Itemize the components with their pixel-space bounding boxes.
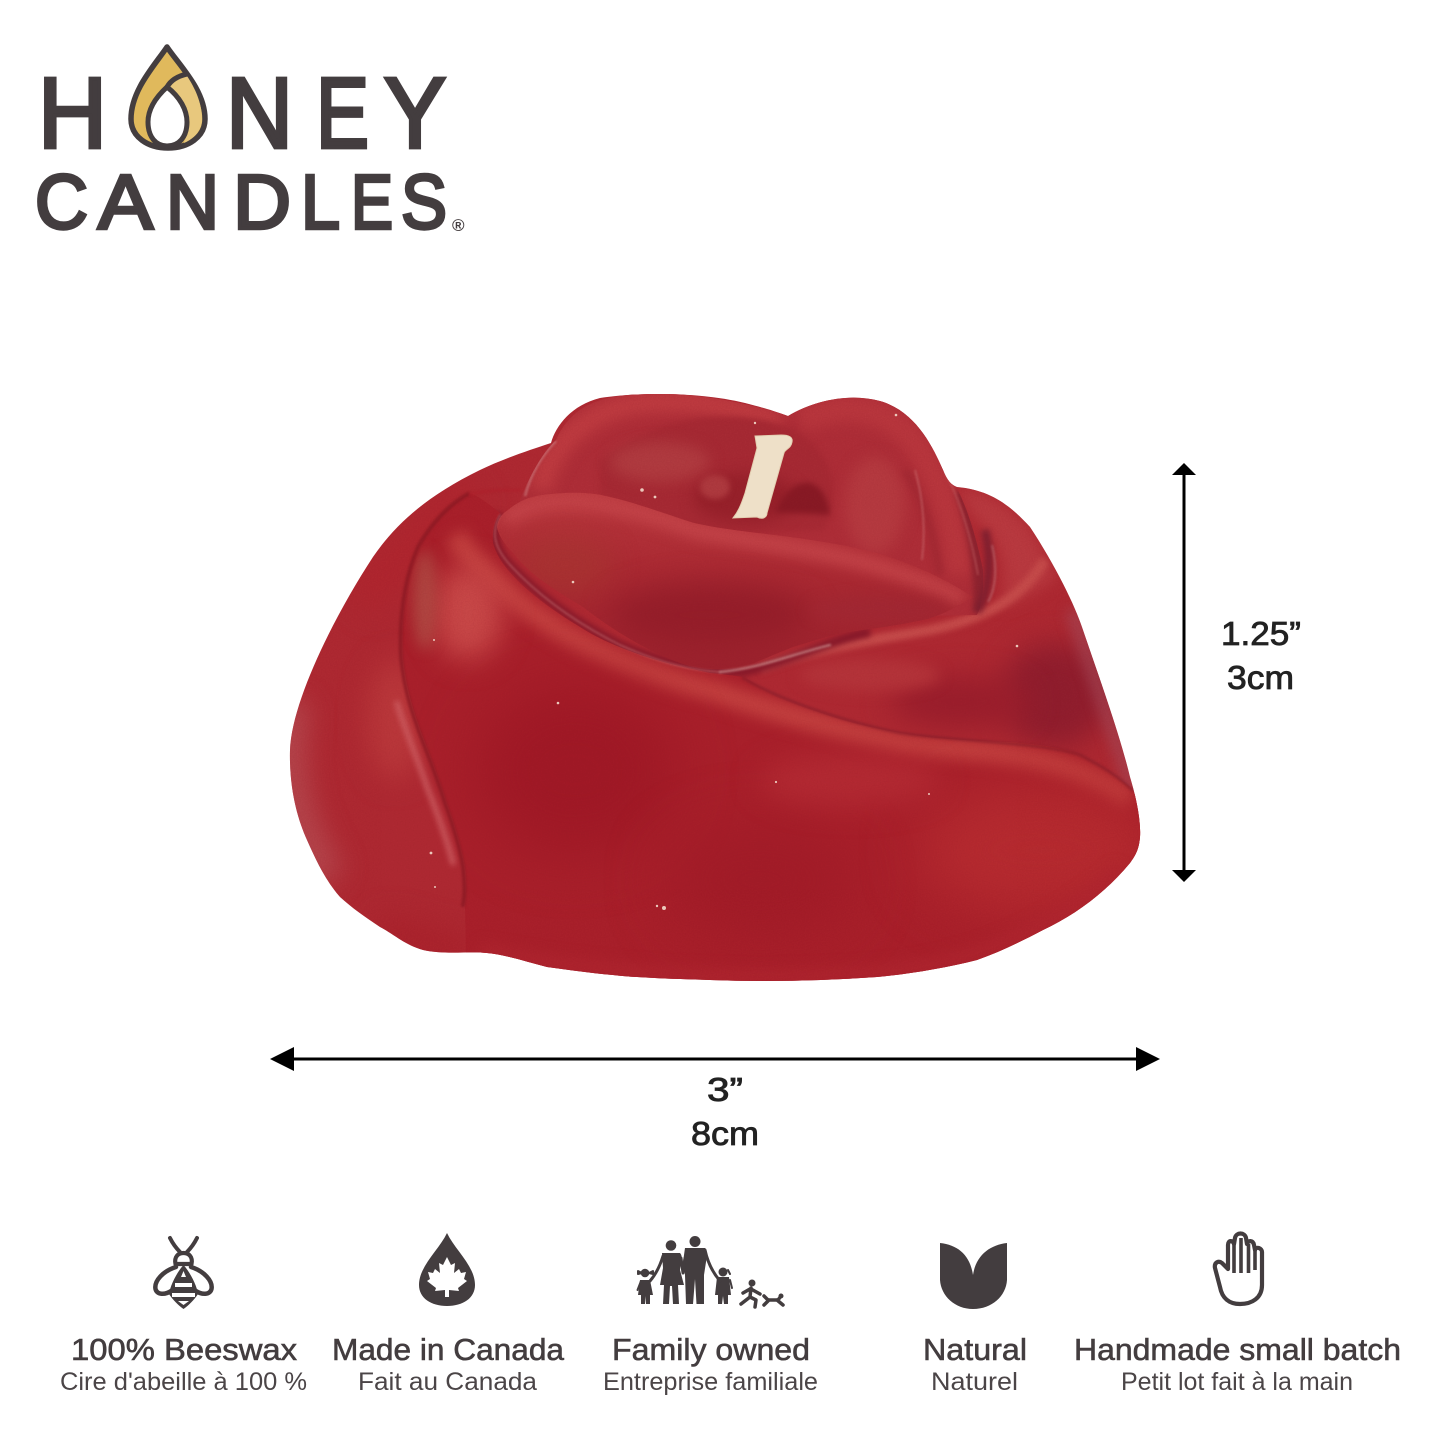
logo: Honey Candles <box>35 47 465 246</box>
outer petals base <box>280 385 1150 990</box>
icon: tulip leaf <box>940 1243 1007 1309</box>
width dimension arrow <box>270 1047 1160 1071</box>
logo wordmark: HONEY <box>38 58 446 170</box>
logo wordmark: HONEY: E <box>316 58 369 170</box>
heading: 100% Beeswax <box>71 1332 298 1367</box>
icon: open hand <box>1215 1234 1262 1304</box>
product photo: red rose beeswax candle <box>280 385 1160 1000</box>
feature: Made in Canada <box>332 1233 565 1396</box>
logo wordmark: HONEY: H <box>38 58 107 170</box>
upper right ridge <box>760 560 1045 668</box>
height dimension arrow <box>1172 463 1196 882</box>
feature: Natural <box>923 1243 1027 1396</box>
feature: 100% Beeswax <box>60 1238 307 1396</box>
wax specks <box>430 414 1018 910</box>
logo wordmark: CANDLES: L <box>301 160 340 246</box>
subheading: Naturel <box>931 1368 1018 1396</box>
logo registered mark: ® <box>452 216 465 235</box>
deep groove right of inner petal <box>977 530 989 612</box>
height label: 1.25” <box>1221 615 1301 652</box>
width label <box>691 1071 759 1152</box>
left petal shading <box>288 700 330 880</box>
candle centre well <box>686 416 788 440</box>
logo wordmark: HONEY: Y <box>384 58 446 170</box>
icon: family with dog <box>638 1236 784 1307</box>
heading: Handmade small batch <box>1074 1332 1401 1367</box>
logo wordmark: CANDLES: S <box>401 160 447 246</box>
logo wordmark: CANDLES <box>35 160 447 246</box>
heading: Family owned <box>612 1332 810 1367</box>
logo wordmark: CANDLES: D <box>233 160 291 246</box>
height label: 3cm <box>1227 659 1294 696</box>
icon: drop with maple leaf <box>419 1233 475 1306</box>
crease lines <box>397 490 1132 905</box>
logo wordmark: CANDLES: N <box>166 160 219 246</box>
logo wordmark: HONEY: N <box>226 58 293 170</box>
front petal and lower band <box>403 506 1140 981</box>
width label: 8cm <box>691 1115 759 1152</box>
icon: bee <box>155 1238 212 1309</box>
width label: 3” <box>707 1071 743 1108</box>
subheading: Petit lot fait à la main <box>1121 1368 1353 1396</box>
height label <box>1221 615 1301 696</box>
logo icon: honey flame <box>131 47 205 148</box>
rear top petals <box>522 394 983 615</box>
feature: Family owned <box>603 1236 818 1396</box>
logo wordmark: CANDLES: A <box>98 160 154 246</box>
subheading: Entreprise familiale <box>603 1368 818 1396</box>
candle wick <box>733 435 792 518</box>
cupped front inner petal <box>497 492 963 669</box>
back right petal <box>958 487 1058 594</box>
heading: Made in Canada <box>332 1332 565 1367</box>
heading: Natural <box>923 1332 1027 1367</box>
subheading: Cire d'abeille à 100 % <box>60 1368 307 1396</box>
logo wordmark: CANDLES: C <box>35 160 88 246</box>
subheading: Fait au Canada <box>358 1368 537 1396</box>
right outer petal shading <box>1000 643 1110 747</box>
feature: Handmade small batch <box>1074 1234 1401 1396</box>
wax grain <box>280 385 1150 990</box>
groove around inner petal <box>495 513 870 672</box>
logo wordmark: CANDLES: E <box>351 160 393 246</box>
